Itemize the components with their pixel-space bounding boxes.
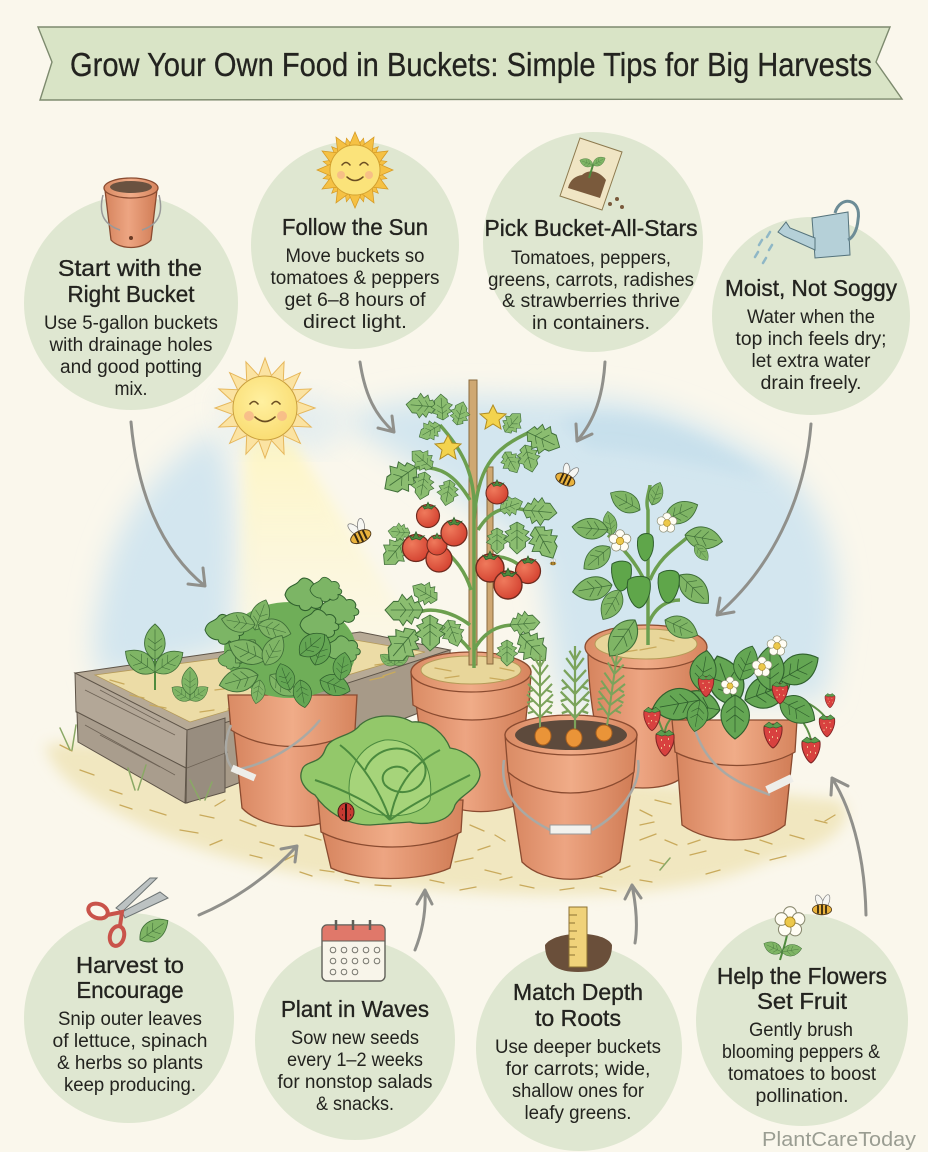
- icon: watering can: [755, 201, 858, 263]
- pepper plant: [571, 480, 724, 663]
- tip: match depth to roots: Match Depth: [513, 979, 643, 1005]
- stakes: [469, 380, 477, 665]
- arrow: all-stars tip to tomato: [576, 362, 605, 441]
- tip: moist not soggy: Moist, Not Soggy: [725, 275, 897, 301]
- tip: help the flowers: Gently brush: [749, 1020, 853, 1041]
- tip: pick bucket all-stars: in containers.: [532, 313, 650, 334]
- tip: plant in waves: [255, 940, 455, 1140]
- tip: match depth to roots: leafy greens.: [524, 1103, 632, 1124]
- tip: plant in waves: every 1–2 weeks: [287, 1050, 423, 1071]
- tip: harvest: of lettuce, spinach: [52, 1031, 208, 1052]
- icon: flower and bee: [761, 894, 832, 960]
- bucket: lettuce: [318, 800, 463, 878]
- carrots and tops: [527, 654, 553, 728]
- tip: pick bucket all-stars: & strawberries thrive: [502, 291, 680, 312]
- icon: calendar: [322, 920, 385, 981]
- tip: plant in waves: Plant in Waves: [281, 996, 429, 1022]
- tip: pick bucket all-stars: [483, 132, 703, 352]
- bucket: carrots: [503, 646, 638, 879]
- tip: match depth to roots: shallow ones for: [512, 1081, 645, 1102]
- tip: plant in waves: Sow new seeds: [291, 1028, 419, 1049]
- bucket: strawberry: [672, 720, 797, 840]
- tip: pick bucket all-stars: Pick Bucket-All-Stars: [484, 215, 698, 241]
- arrow: flowers tip to strawberries: [831, 778, 866, 915]
- lettuce head: [301, 716, 480, 825]
- bee: tiny: [550, 559, 556, 565]
- tip: follow the sun: Move buckets so: [286, 246, 424, 267]
- tip: match depth to roots: Use deeper buckets: [495, 1037, 661, 1058]
- tip: help the flowers: [696, 914, 908, 1126]
- seedling in bed: [120, 624, 412, 705]
- arrow: bucket tip to herbs: [131, 422, 205, 586]
- tip: help the flowers: Help the Flowers: [717, 963, 887, 989]
- straw ground: [45, 743, 846, 895]
- tip: follow the sun: [251, 141, 459, 349]
- tip: help the flowers: pollination.: [756, 1086, 848, 1107]
- tip: harvest: Encourage: [76, 977, 184, 1003]
- tomato plant: [374, 380, 566, 671]
- icon: smiling sun: [315, 130, 395, 210]
- tip: follow the sun: get 6–8 hours of: [284, 290, 426, 311]
- icon: ruler in soil: [545, 907, 612, 972]
- icon: orange bucket: [101, 178, 161, 248]
- tip: harvest: [24, 913, 234, 1123]
- sun beams: [240, 440, 420, 650]
- large sun: [215, 358, 315, 458]
- tip: pick bucket all-stars: greens, carrots, radishes: [488, 270, 694, 291]
- tip: harvest: Harvest to: [76, 952, 184, 978]
- tip: moist not soggy: Water when the: [747, 307, 875, 328]
- tip: moist not soggy: drain freely.: [760, 373, 862, 394]
- tip: start with the right bucket: with drainage holes: [49, 335, 212, 356]
- tip: start with the right bucket: and good potting: [60, 357, 202, 378]
- watermark: PlantCareToday: [762, 1129, 916, 1151]
- ladybug: [338, 803, 354, 821]
- tip: help the flowers: Set Fruit: [757, 988, 848, 1014]
- arrow: waves tip to bucket: [415, 890, 432, 950]
- bucket: pepper (back): [585, 625, 707, 788]
- arrow: water tip to pepper: [717, 424, 811, 615]
- tip: moist not soggy: let extra water: [752, 351, 871, 372]
- tip: follow the sun: direct light.: [303, 312, 407, 333]
- tip: start with the right bucket: Start with the: [58, 255, 202, 281]
- tip: help the flowers: tomatoes to boost: [728, 1064, 877, 1085]
- tomatoes: [416, 502, 440, 528]
- raised garden bed: [75, 624, 452, 803]
- tomato flowers: [480, 405, 506, 429]
- stems: [410, 425, 530, 668]
- tip: harvest: & herbs so plants: [57, 1053, 203, 1074]
- watercolor sky: [94, 392, 838, 700]
- tip: start with the right bucket: mix.: [114, 379, 148, 400]
- strawberry plant: [644, 636, 835, 763]
- green peppers: [612, 534, 679, 608]
- arrow: depth tip to carrots: [625, 885, 641, 943]
- tip: plant in waves: & snacks.: [316, 1094, 394, 1115]
- tip: match depth to roots: to Roots: [535, 1005, 621, 1031]
- bucket: herbs: [226, 695, 357, 827]
- tip: start with the right bucket: Right Bucket: [68, 281, 195, 307]
- tip: match depth to roots: [476, 945, 682, 1151]
- herb plants: [205, 577, 360, 709]
- tip: follow the sun: Follow the Sun: [282, 214, 428, 240]
- icon: scissors with leaf: [86, 878, 173, 948]
- tip: start with the right bucket: [24, 196, 238, 410]
- bee: left: [343, 516, 373, 546]
- tip: moist not soggy: top inch feels dry;: [736, 329, 886, 350]
- tip: follow the sun: tomatoes & peppers: [270, 268, 440, 289]
- tip: moist not soggy: [712, 217, 910, 415]
- tip: help the flowers: blooming peppers &: [722, 1042, 880, 1063]
- grass tufts: [60, 725, 670, 870]
- icon: seed packet: [560, 138, 624, 210]
- tip: harvest: keep producing.: [64, 1075, 196, 1096]
- arrow: sun tip to tomato: [360, 362, 394, 432]
- tip: pick bucket all-stars: Tomatoes, peppers,: [511, 248, 671, 269]
- tip: harvest: Snip outer leaves: [58, 1009, 202, 1030]
- tip: plant in waves: for nonstop salads: [278, 1072, 432, 1093]
- arrow: harvest tip to lettuce: [199, 846, 297, 915]
- bucket: tomato: [411, 652, 531, 812]
- bee: right: [554, 460, 582, 489]
- tip: start with the right bucket: Use 5-gallon buckets: [44, 313, 218, 334]
- title banner: [38, 27, 902, 100]
- tip: match depth to roots: for carrots; wide,: [506, 1059, 650, 1080]
